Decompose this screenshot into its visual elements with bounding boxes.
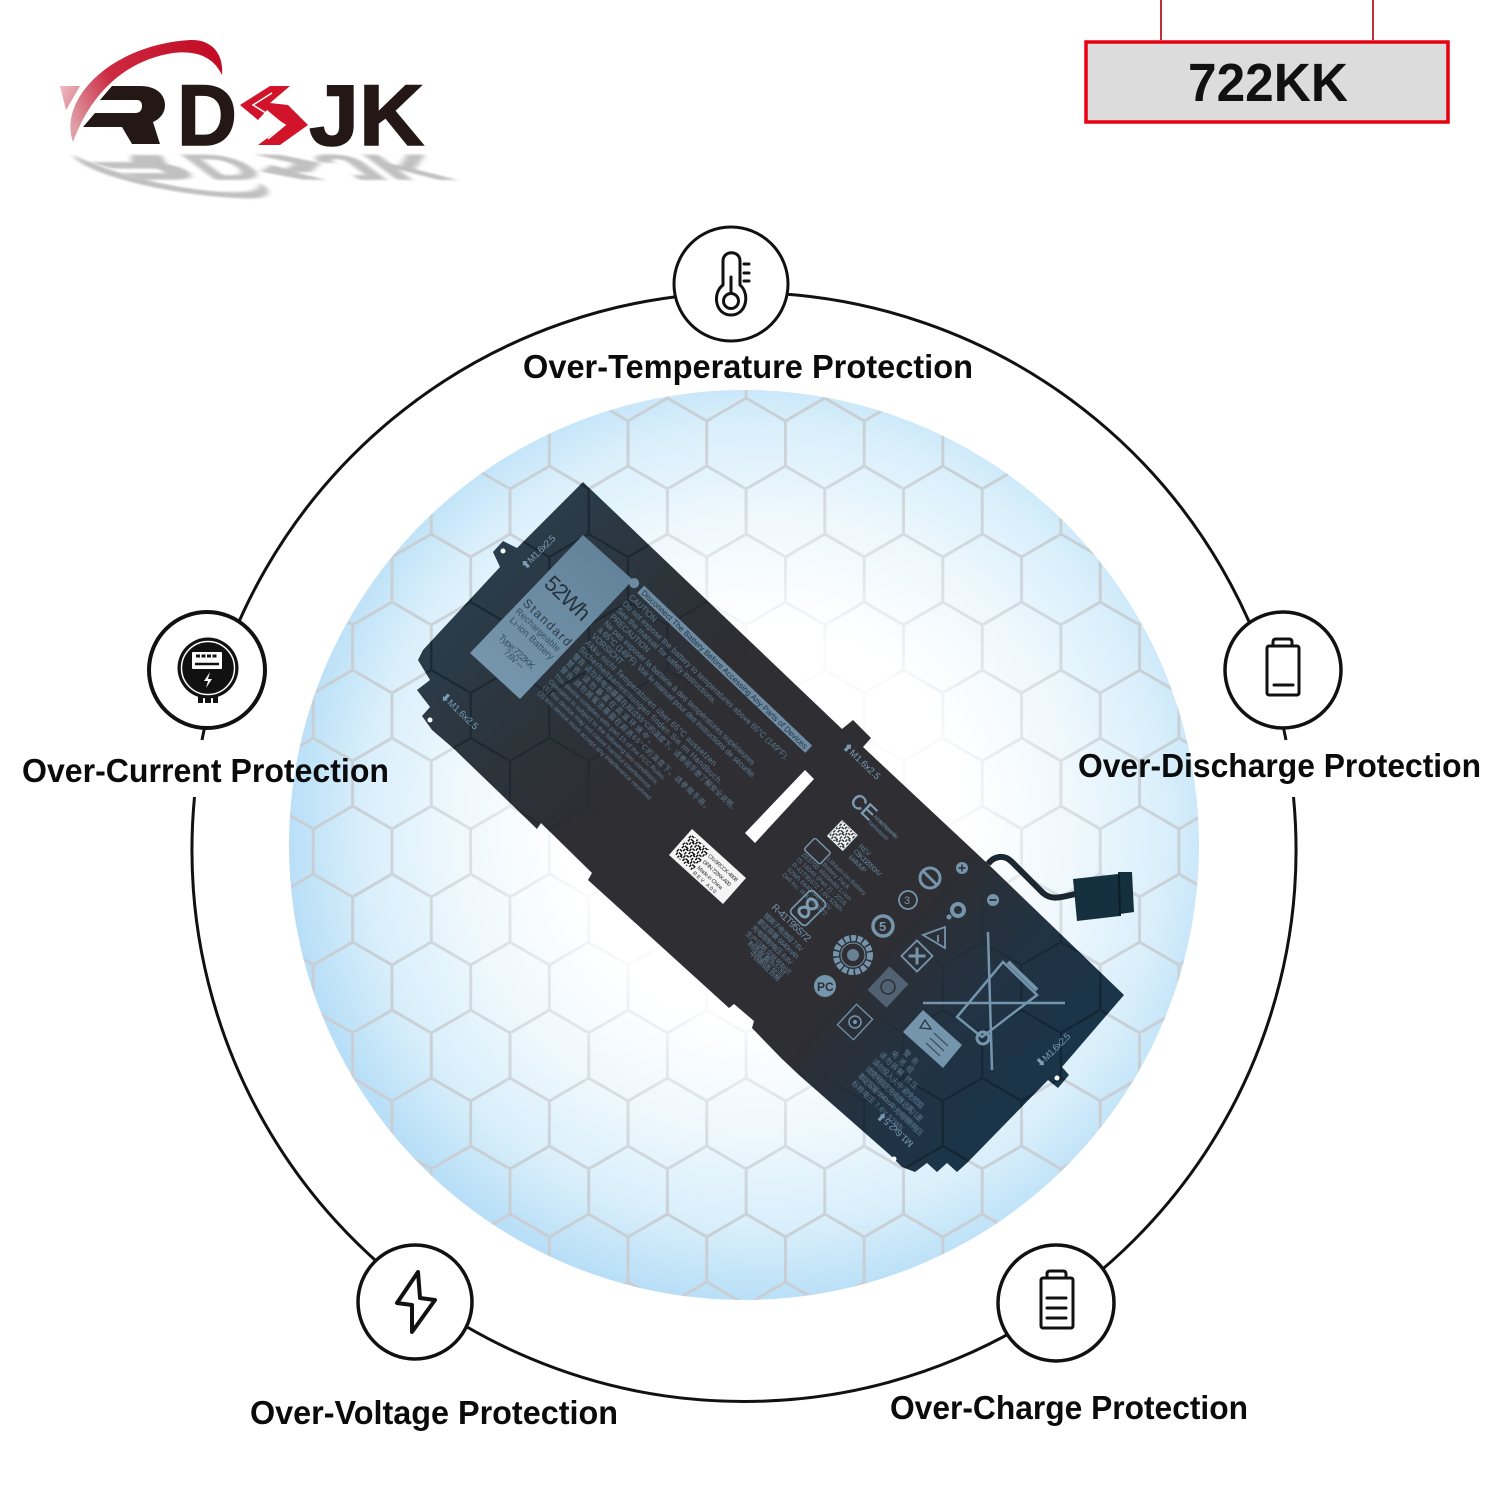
- bottom regulatory text: 电池组: [890, 1049, 916, 1075]
- compliance text block: ZE5700 4500mAh Li-ion: [800, 851, 853, 903]
- recycling and safety icons: 3: [904, 895, 910, 907]
- CE mark and small QR code: CE: [846, 790, 881, 825]
- logo reflection: D: [167, 147, 280, 187]
- battery cable and connector: [988, 857, 1134, 921]
- serial barcode sticker: REV A00: [691, 871, 717, 895]
- caution text: 警告 请勿暴露在高温环境中。: [565, 658, 658, 747]
- logo reflection: [61, 147, 482, 198]
- caution text: PRECAUTION: [608, 613, 651, 654]
- caution text: Operation is subject to the following two conditions:: [547, 678, 660, 787]
- serial barcode sticker: [669, 829, 746, 904]
- bottom regulatory text: 请使用指定充电器 远离儿童: [864, 1064, 925, 1123]
- outer ring: [192, 293, 1296, 1401]
- caution text: [536, 593, 797, 851]
- recycling and safety icons: 5: [879, 919, 886, 934]
- CE mark and small QR code: REV: [857, 843, 872, 858]
- logo red swoosh: [70, 40, 222, 142]
- caution text: à 65°C (149°F). Voir le manuel pour des instructions de sécurité.: [596, 626, 758, 780]
- caution text: 警告 請勿將電池暴露在超過65°C的溫度下。請參閱手冊。: [559, 665, 713, 813]
- caution text: VORSICHT: [590, 632, 625, 667]
- screw markings: ⬆M1.6x2.5: [519, 533, 558, 572]
- caution text: Do not expose the battery to temperatures above 65°C (149°F).: [621, 600, 790, 762]
- compliance text block: Battery Pack: [821, 862, 851, 891]
- battery: [410, 470, 1140, 1180]
- logo: RDSJK: [60, 40, 482, 198]
- bottom regulatory text: 请勿拆解 挤压: [878, 1050, 920, 1091]
- certification mark and text: 制造商 戴尔公司: [746, 939, 787, 979]
- bottom regulatory text: 标称电压 7.6V 52Wh: [850, 1079, 905, 1132]
- capacity label: Rechargeable: [514, 606, 563, 653]
- CE mark and small QR code: Authorized Representative: [872, 814, 899, 841]
- logo letter R: [83, 86, 165, 144]
- certification mark and text: 中国制造 合格: [748, 949, 783, 983]
- caution text: 警告 请勿将电池暴露在超过65°C的温度下。请参阅手册了解安全说明。: [571, 652, 740, 813]
- logo triangle: [60, 86, 80, 110]
- caution text: (1) this device may not cause harmful interference,: [541, 684, 653, 792]
- logo letters JK: JK: [309, 68, 424, 164]
- hazard label: [903, 1010, 962, 1068]
- icon: lightning bolt: [358, 1245, 472, 1359]
- capacity label: 7.6V ⎓: [502, 647, 526, 671]
- logo reflection: JK: [298, 147, 467, 187]
- screw markings: ⬇M1.6x2.5: [438, 691, 480, 732]
- screw markings: [438, 533, 1073, 1149]
- mounting holes: [428, 548, 1060, 1162]
- logo letter D: D: [177, 68, 237, 164]
- screw markings: ⬇M1.6x2.5: [1034, 1031, 1073, 1070]
- icon: full battery: [998, 1245, 1114, 1361]
- CE mark and small QR code: Netherlands: [867, 820, 890, 843]
- caution text: This device complies with part 15 of the FCC Rules.: [552, 673, 667, 782]
- certification mark and text: 生产日期 见批号标识: [744, 929, 793, 977]
- icon: thermometer: [674, 227, 788, 341]
- white slot: [745, 770, 814, 843]
- compliance text block: 52Wh 6840mAh 7.6V: [785, 867, 833, 913]
- caution text: See the manual for safety instructions.: [614, 606, 718, 706]
- CE mark and small QR code: C5KJ028S0XV: [852, 848, 883, 879]
- recycling and safety icons: PC: [817, 980, 834, 994]
- serial barcode sticker: CN-0RCCK-4808: [706, 854, 739, 883]
- battery body: [417, 482, 1124, 1172]
- model badge: 722KK: [1188, 53, 1348, 113]
- capacity label: 52Wh: [540, 571, 596, 626]
- compliance text block: R-41T95S72 7.6V 52Wh: [790, 862, 844, 914]
- caution text: Akku nicht Temperaturen über 65°C aussetzen: [583, 639, 718, 768]
- label: over-voltage protection: Over-Voltage Protection: [250, 1394, 618, 1431]
- bottom regulatory text: 请勿投入火中 避免短路: [871, 1057, 926, 1110]
- capacity label: [470, 535, 633, 699]
- certification mark and text: R-41T95S72: [769, 902, 813, 945]
- label: over-discharge protection: Over-Discharge Protection: [1078, 747, 1481, 784]
- compliance text block: Lithium-ion Battery: [825, 856, 868, 898]
- CE mark and small QR code: [827, 790, 899, 879]
- certification mark and text: 充电限制电压 8.8V: [750, 923, 795, 967]
- terminal marks: [956, 862, 999, 906]
- label: over-temperature protection: Over-Temperature Protection: [523, 348, 973, 385]
- compliance text block: Dell Inc. R-41T95S72: [780, 872, 829, 918]
- screw markings: M1.6x2.5⬇: [875, 1109, 916, 1149]
- certification mark and text: 锂离子电池组 7.6V: [762, 911, 806, 954]
- caution text: Ne pas exposer la batterie à des températures supérieures: [602, 619, 757, 767]
- serial barcode sticker: Made in China: [696, 865, 724, 892]
- blue hexagon disc: [280, 380, 1210, 1310]
- serial barcode sticker: DP/N 722KK-A00: [701, 859, 732, 888]
- recycling and safety icons: [814, 868, 964, 1040]
- compliance text block: IS 16046 (Part 2) : 2018: [795, 857, 848, 908]
- warning strip: Disconnect The Battery Before Accessing Any Parts of Devices: [639, 588, 809, 751]
- label: over-current protection: Over-Current Protection: [22, 752, 389, 789]
- caution text: (2) this device must accept any interference received.: [536, 690, 654, 803]
- bottom regulatory text: [850, 1037, 958, 1144]
- caution text: CAUTION: [627, 593, 658, 624]
- capacity label: Standard: [520, 596, 575, 649]
- bottom regulatory text: 额定容量 6840mAh 充电限制电压: [857, 1071, 925, 1137]
- compliance text block: [779, 838, 870, 928]
- crossed-out bin icon: [923, 932, 1065, 1070]
- icon: electric meter: [149, 612, 265, 728]
- model badge: [1086, 0, 1448, 122]
- bottom regulatory text: 警告: [902, 1048, 921, 1067]
- screw markings: ⬆M1.6x2.5: [840, 741, 882, 782]
- certification mark and text: [744, 889, 827, 983]
- logo red double arrow: [240, 86, 308, 145]
- caution text: Sicherheitsanweisungen finden Sie im Handbuch.: [577, 645, 725, 786]
- icon: low battery: [1225, 612, 1341, 728]
- capacity label: Type:722KK: [496, 632, 537, 672]
- CE mark and small QR code: M4MVP: [847, 854, 868, 875]
- certification mark and text: 额定容量 6840mAh: [756, 917, 801, 961]
- capacity label: Li-ion Battery: [507, 615, 556, 663]
- label: over-charge protection: Over-Charge Protection: [890, 1389, 1248, 1426]
